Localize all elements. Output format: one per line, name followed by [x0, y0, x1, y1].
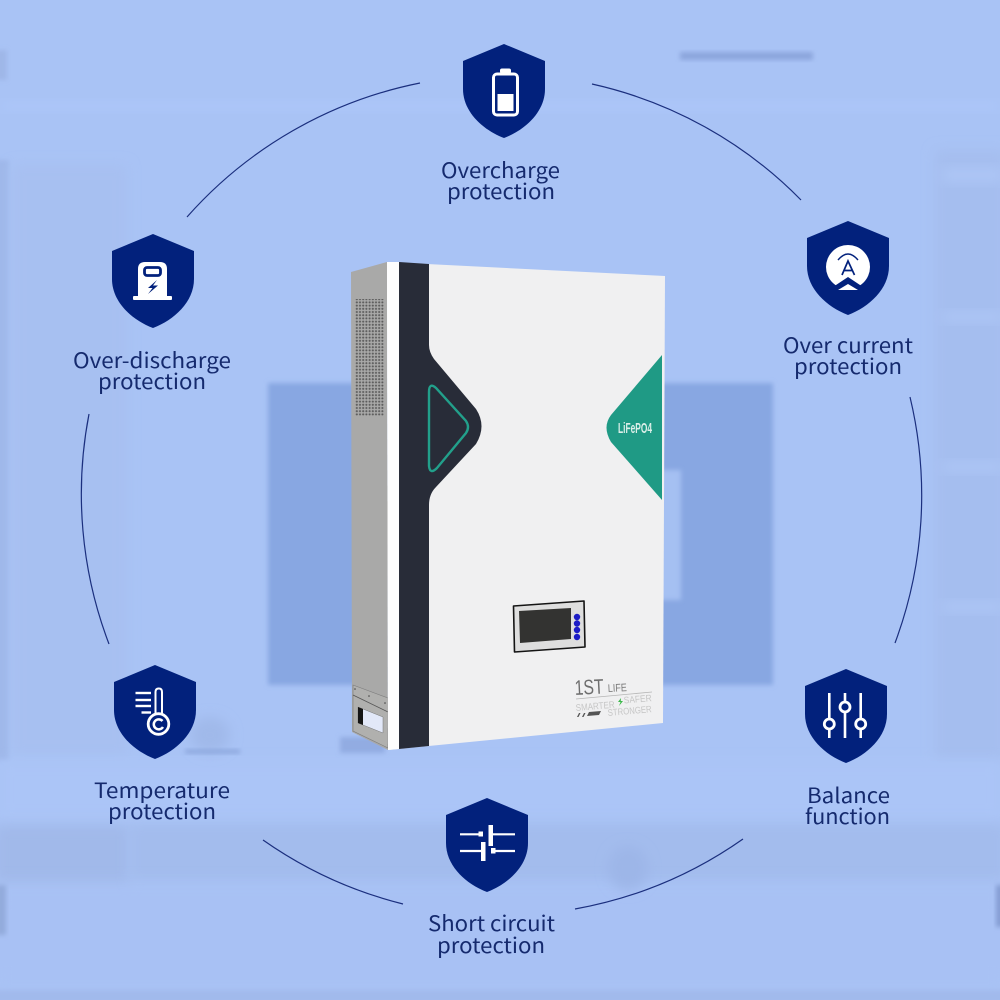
label: protection: [447, 176, 555, 206]
feature: over-discharge protection: [73, 234, 231, 396]
label: Short circuit: [428, 908, 555, 938]
label: protection: [794, 351, 902, 381]
green LiFePO4 tag: LiFePO4: [618, 420, 652, 437]
shield icon: thermometer: [114, 665, 196, 759]
teal triangle outline: [429, 386, 468, 471]
battery cabinet: [351, 262, 665, 750]
shield icon: sliders: [805, 669, 887, 763]
front panel: [387, 262, 665, 750]
brand logo: LIFE: [608, 682, 627, 695]
side panel: [351, 262, 388, 750]
label: Temperature: [94, 775, 230, 805]
brand logo: SAFER: [623, 693, 652, 706]
shield icon: battery: [463, 44, 545, 138]
ventilation holes: [355, 299, 384, 416]
circle arc segments: [81, 83, 922, 909]
label: Over-discharge: [73, 345, 231, 375]
brand logo: SMARTER: [575, 700, 615, 714]
label: Overcharge: [441, 155, 560, 185]
feature: temperature protection: [94, 665, 230, 826]
label: function: [805, 801, 890, 831]
shield icon: ammeter: [807, 221, 889, 315]
feature: balance function: [805, 669, 890, 831]
brand logo: 1ST: [574, 676, 604, 700]
display unit: [514, 601, 585, 652]
green LiFePO4 tag: [606, 355, 662, 500]
feature: over current protection: [783, 221, 913, 381]
dark strip with arrow bulge: [399, 262, 482, 749]
brand logo: STRONGER: [607, 704, 652, 719]
shield icon: circuit: [446, 798, 528, 892]
label: protection: [437, 930, 545, 960]
feature: overcharge protection: [441, 44, 560, 206]
bottom bracket: [353, 685, 388, 748]
label: Over current: [783, 330, 913, 360]
brand logo: [574, 676, 652, 719]
label: Balance: [807, 780, 890, 810]
label: protection: [108, 796, 216, 826]
shield icon: charging station: [112, 234, 194, 328]
label: protection: [98, 366, 206, 396]
feature: short circuit protection: [428, 798, 555, 960]
